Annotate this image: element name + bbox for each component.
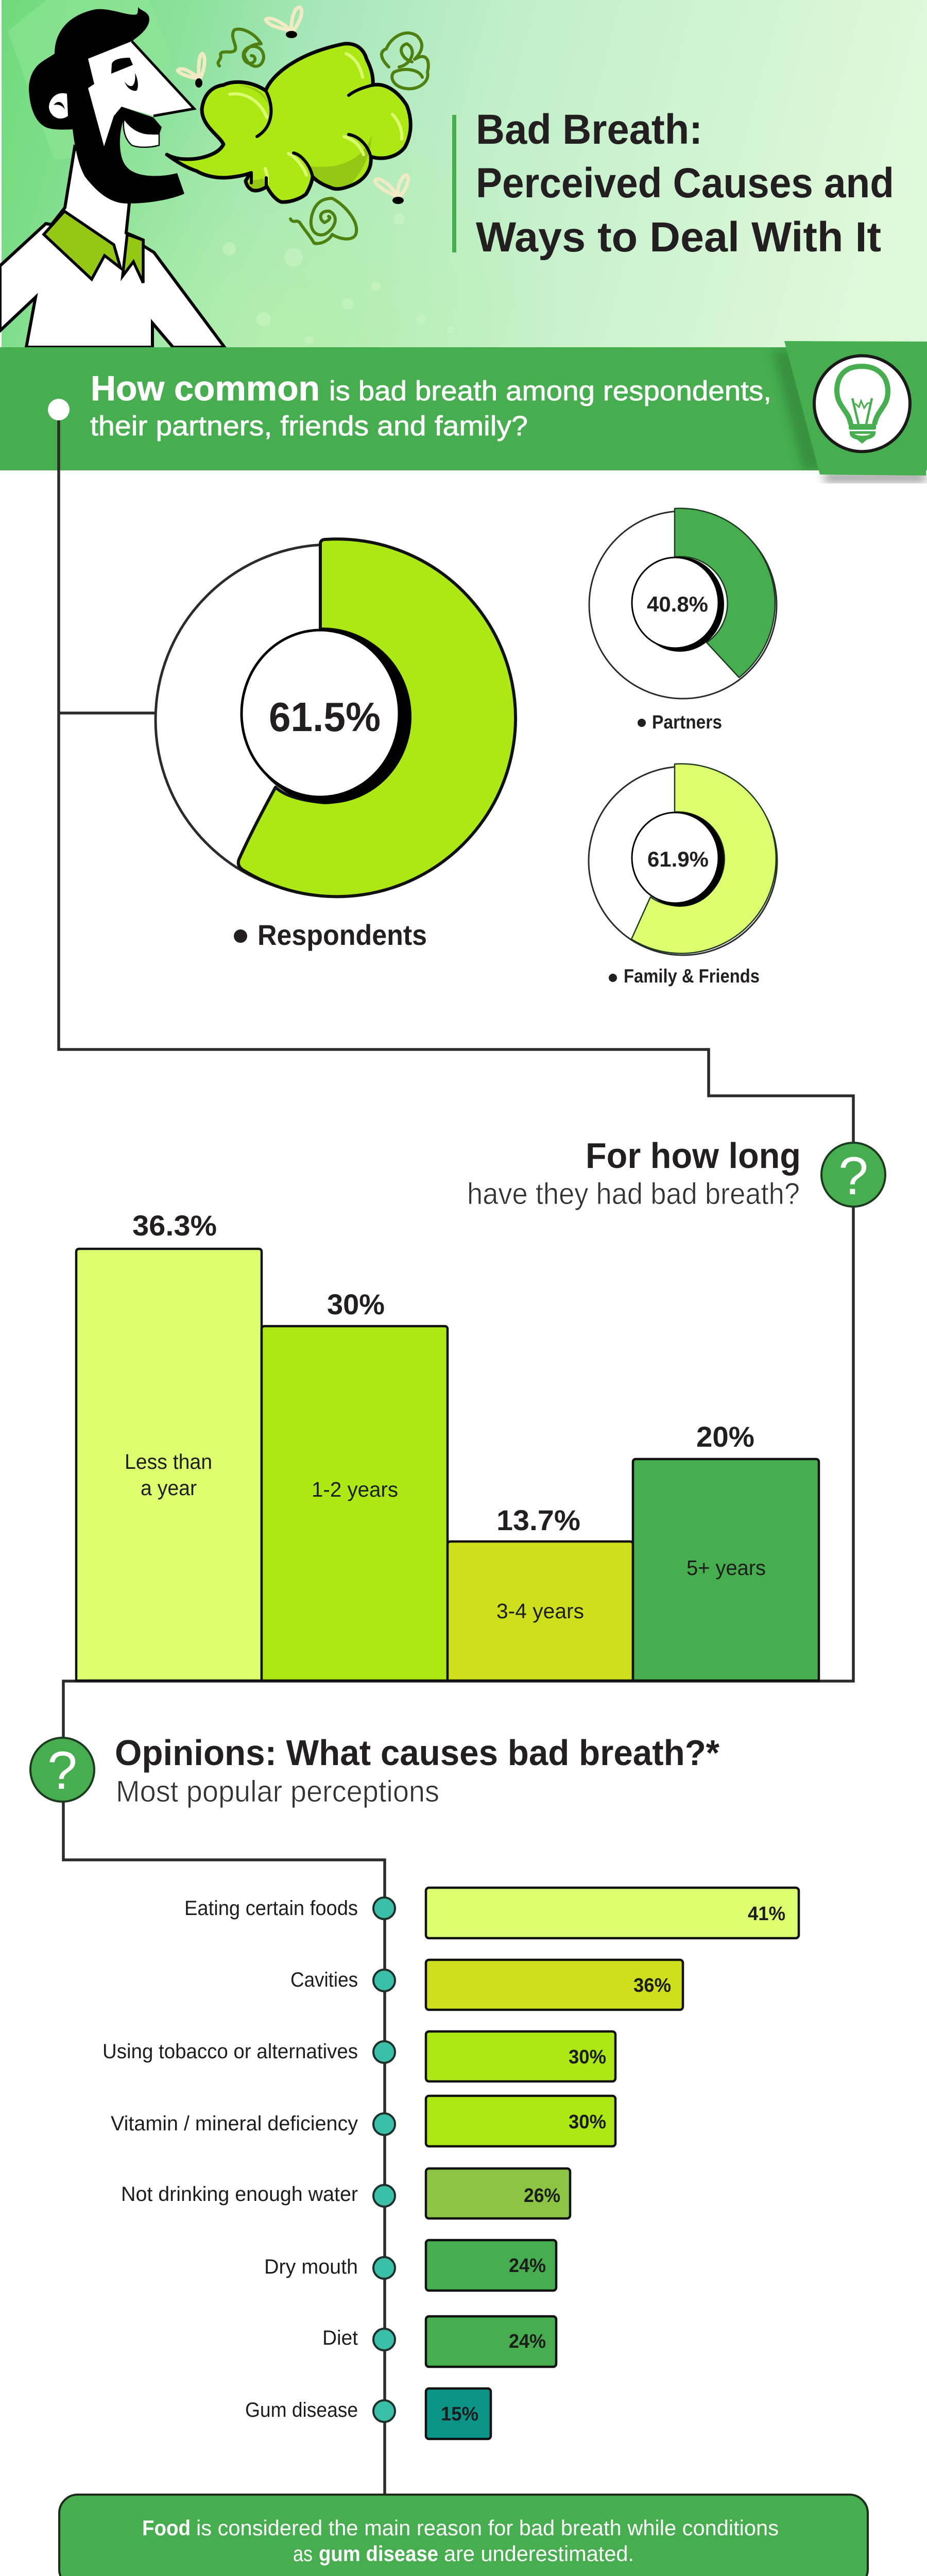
callout: food conclusion: as (293, 2541, 313, 2566)
row: not drinking water: Not drinking enough water (121, 2183, 358, 2206)
banner heading: is bad breath among respondents, (329, 376, 771, 406)
row: gum disease: 15% (441, 2403, 478, 2425)
icon: flies (178, 7, 408, 204)
icon: light bulb (837, 366, 888, 444)
title: Ways to Deal With It (476, 214, 881, 261)
partners label: Partners (652, 711, 722, 733)
title accent bar (452, 115, 456, 252)
row: not drinking water (121, 2168, 570, 2218)
row: gum disease (245, 2388, 491, 2439)
row: dry mouth: 24% (509, 2255, 546, 2277)
callout: food conclusion: is considered the main reason for bad breath while conditions (196, 2516, 779, 2540)
chart: family and friends donut (589, 764, 777, 987)
tab with light bulb icon (772, 341, 927, 481)
man's ear (49, 93, 68, 118)
bar: 5+ years: 5+ years (686, 1556, 766, 1580)
callout: food conclusion: are underestimated. (444, 2541, 634, 2566)
illustration: bearded man (0, 7, 225, 347)
heading: opinions: Opinions: What causes bad breath?* (115, 1733, 720, 1773)
icon: question mark: ? (838, 1146, 868, 1206)
callout: food conclusion (59, 2495, 868, 2576)
heading: for how long: have they had bad breath? (467, 1177, 800, 1211)
respondents value: 61.5% (269, 694, 381, 740)
row: using tobacco (102, 2031, 615, 2081)
bar: less than a year (76, 1209, 262, 1681)
row: using tobacco: 30% (569, 2046, 606, 2068)
heading: for how long (467, 1136, 801, 1211)
row: cavities (290, 1960, 683, 2010)
row: vitamin deficiency: Vitamin / mineral deficiency (111, 2112, 358, 2135)
family and friends label: Family & Friends (624, 965, 760, 987)
row: dry mouth (264, 2240, 556, 2291)
chart: partners donut (589, 509, 777, 733)
row: vitamin deficiency (111, 2096, 615, 2146)
banner heading (90, 369, 771, 442)
icon: question mark (821, 1143, 885, 1207)
bar: 3-4 years (448, 1504, 633, 1681)
row: cavities: 36% (633, 1975, 671, 1996)
man's shirt and neck (0, 147, 225, 347)
bar: less than a year: a year (141, 1476, 197, 1500)
cloud highlights (230, 54, 402, 184)
bar: 3-4 years: 3-4 years (496, 1599, 584, 1623)
row: using tobacco: Using tobacco or alternatives (102, 2040, 358, 2063)
cloud shading (238, 86, 372, 190)
panel: header illustration (0, 0, 927, 350)
bar: 3-4 years: 13.7% (496, 1504, 580, 1536)
row: eating certain foods: 41% (748, 1903, 785, 1925)
respondents label: Respondents (258, 919, 427, 951)
bar: less than a year: Less than (125, 1450, 212, 1473)
bar: 1-2 years: 30% (327, 1288, 385, 1320)
banner heading: their partners, friends and family? (90, 411, 528, 442)
icon: stink swirls (218, 29, 428, 244)
man's collar (44, 211, 143, 283)
heading: opinions (115, 1733, 720, 1808)
row: diet: 24% (509, 2331, 546, 2352)
bar: less than a year: 36.3% (132, 1209, 217, 1242)
chart: perceived causes (102, 1888, 799, 2439)
chart: duration bars (76, 1209, 819, 1681)
flow line connecting the sections (48, 399, 853, 2576)
callout: food conclusion: Food (142, 2516, 191, 2540)
man's teeth (124, 118, 159, 147)
banner heading: How common (91, 369, 320, 408)
icon: question mark (30, 1738, 94, 1802)
title (476, 106, 894, 261)
title: Bad Breath: (476, 106, 702, 153)
family and friends value: 61.9% (647, 847, 709, 871)
header background (2, 0, 927, 350)
partners value: 40.8% (647, 592, 708, 616)
row: cavities: Cavities (290, 1969, 358, 1991)
man's eye and eyebrow (111, 58, 138, 91)
panel: question banner (0, 341, 927, 481)
bar: 1-2 years (262, 1288, 448, 1681)
row: not drinking water: 26% (524, 2185, 560, 2207)
illustration: breath cloud (167, 44, 410, 202)
callout: food conclusion: gum disease (319, 2541, 438, 2566)
row: vitamin deficiency: 30% (569, 2111, 606, 2133)
heading: for how long: For how long (586, 1136, 801, 1176)
man's face (88, 41, 194, 146)
bar: 5+ years (633, 1420, 819, 1681)
bar: 5+ years: 20% (696, 1420, 754, 1453)
row: eating certain foods: Eating certain foods (184, 1897, 358, 1920)
row: dry mouth: Dry mouth (264, 2256, 358, 2278)
row: gum disease: Gum disease (245, 2399, 358, 2421)
row: eating certain foods (184, 1888, 799, 1938)
man's moustache (119, 107, 162, 134)
man's hair and beard (29, 7, 184, 204)
chart: respondents donut (156, 539, 516, 951)
bar: 1-2 years: 1-2 years (312, 1478, 398, 1501)
title: Perceived Causes and (476, 160, 894, 207)
row: diet: Diet (322, 2327, 358, 2349)
icon: question mark: ? (47, 1741, 77, 1801)
row: diet (322, 2316, 556, 2367)
heading: opinions: Most popular perceptions (116, 1775, 439, 1808)
cloud outline (167, 44, 410, 202)
